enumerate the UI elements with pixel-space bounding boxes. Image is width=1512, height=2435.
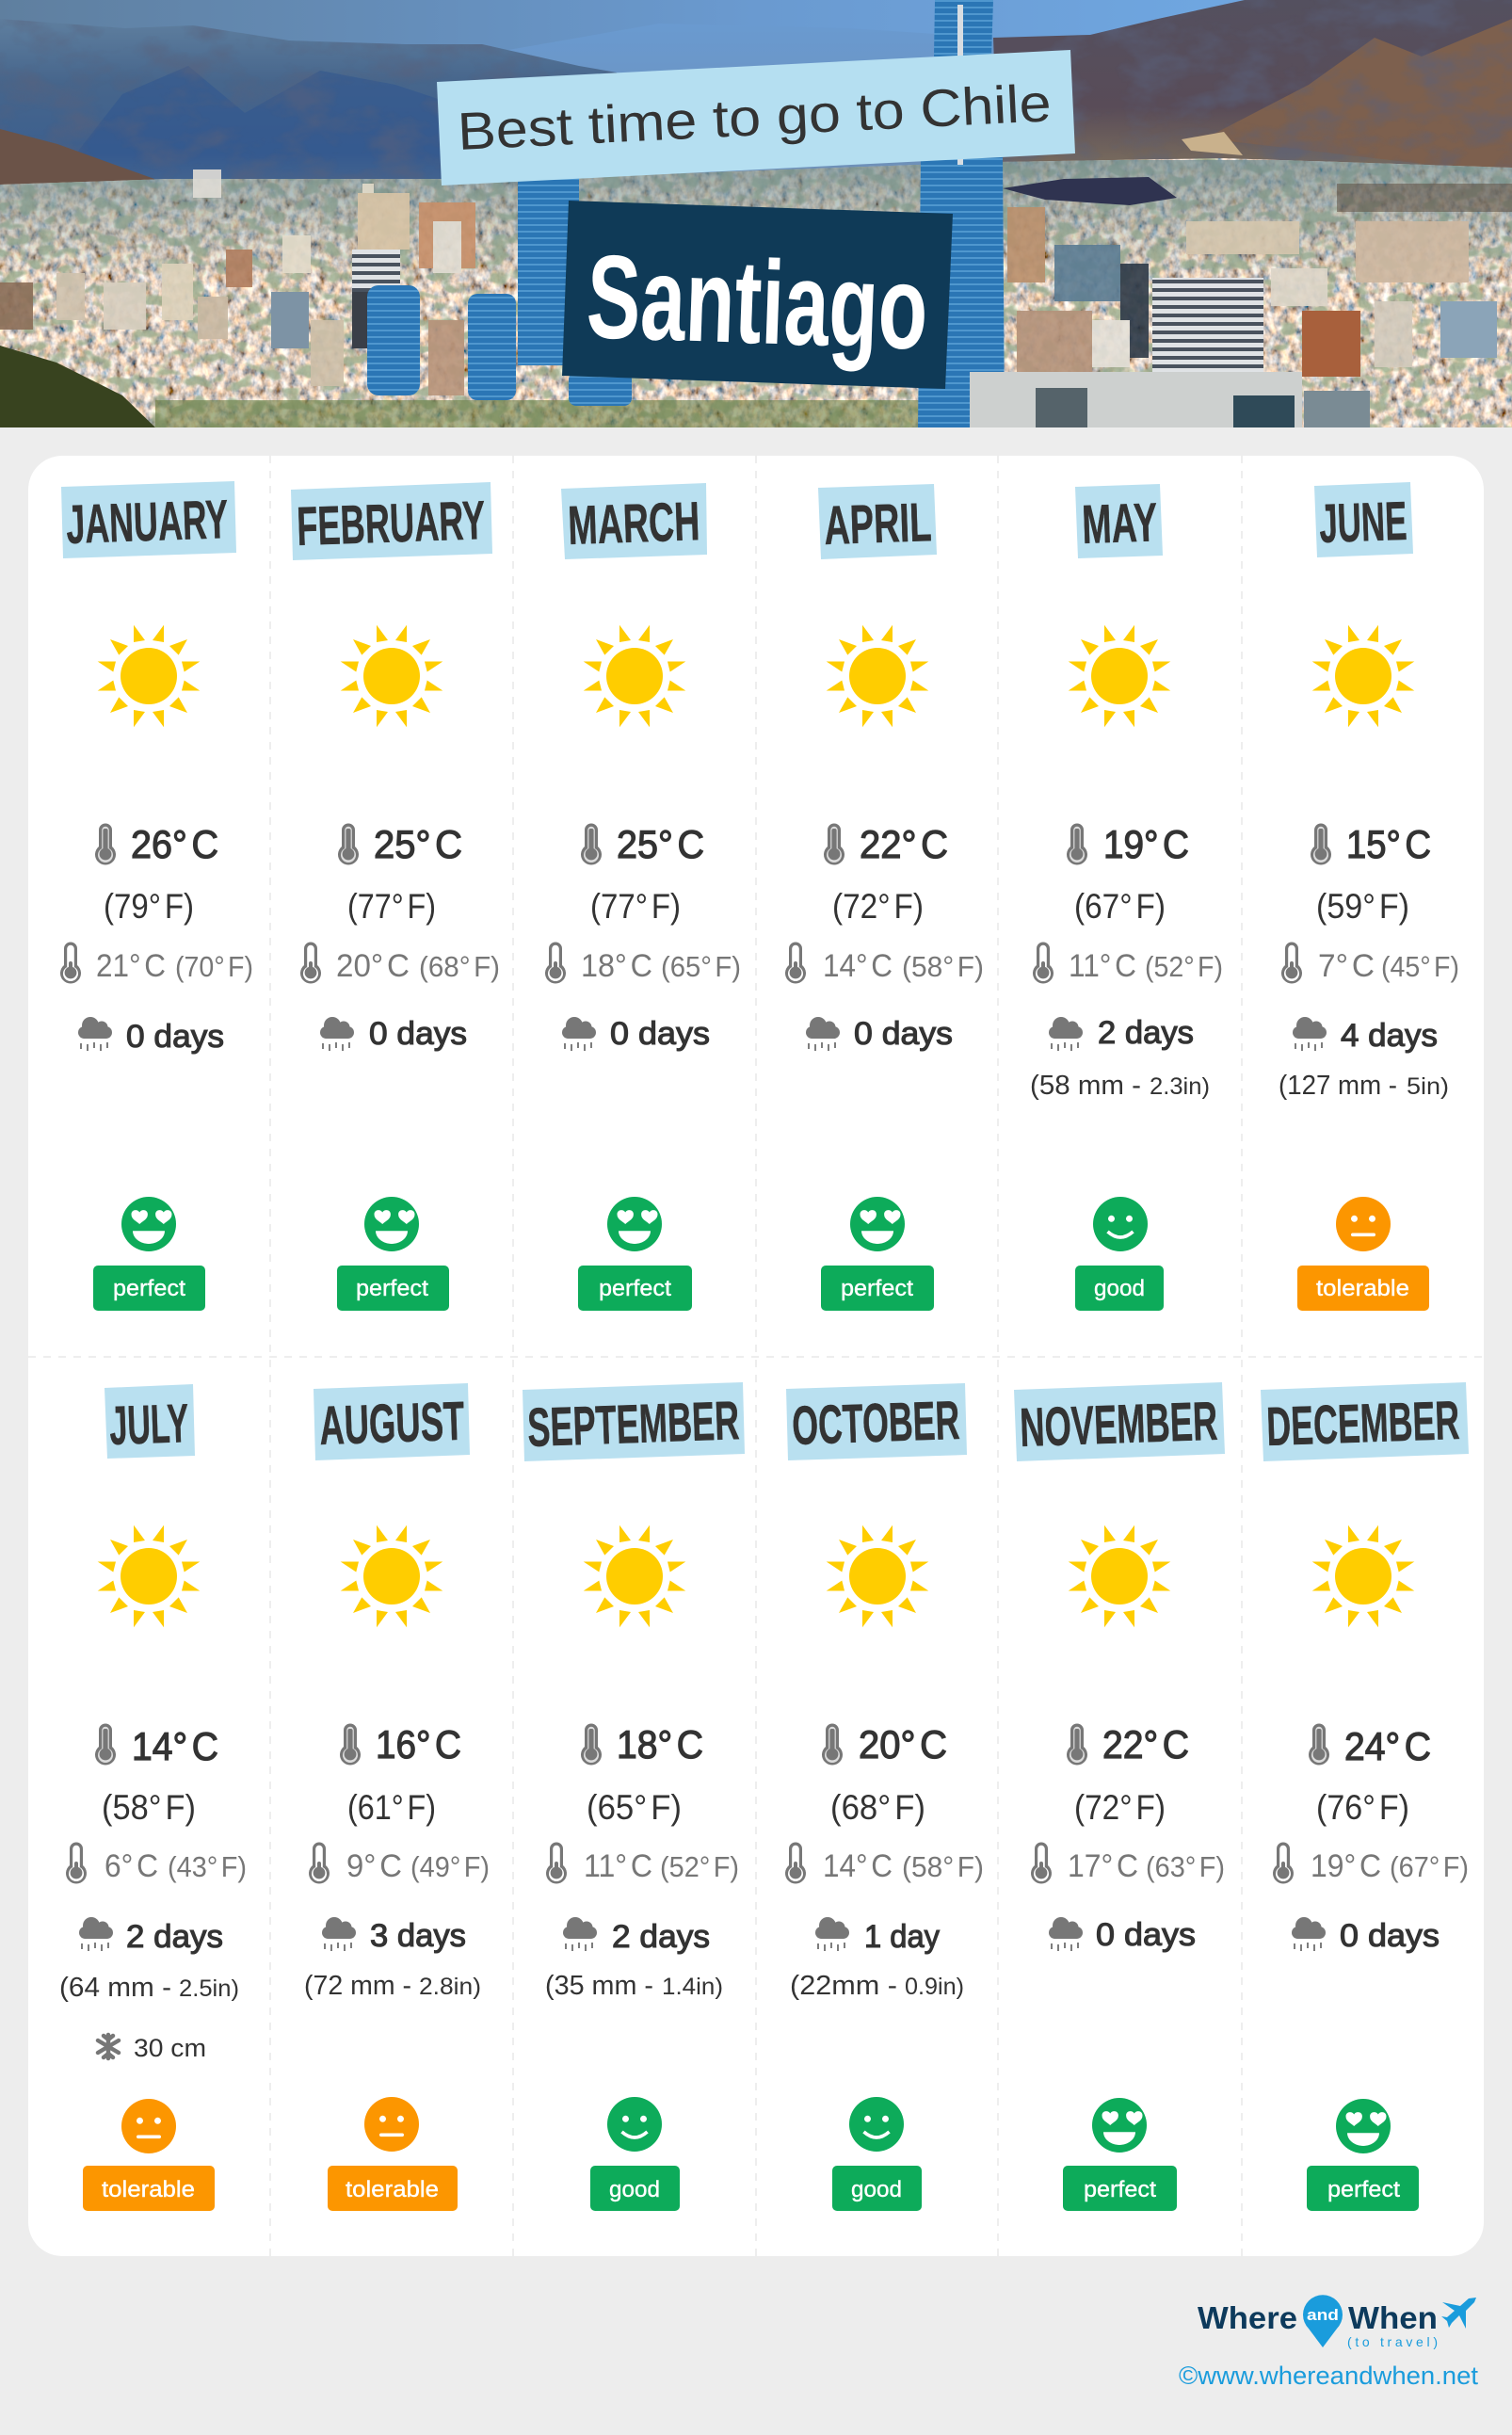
icon: sun <box>827 625 928 727</box>
rating: tolerable: tolerable <box>1316 1276 1409 1301</box>
high temperature <box>95 822 218 866</box>
low temperature: 7° C <box>1318 948 1375 984</box>
rain days: 2 days <box>1098 1015 1194 1051</box>
month: January <box>60 481 253 1311</box>
low temperature: (58° F) <box>902 1850 984 1883</box>
low temperature <box>60 942 253 984</box>
rating: tolerable: tolerable <box>346 2177 439 2202</box>
rating: perfect: perfect <box>356 1276 428 1301</box>
low temperature <box>545 942 741 984</box>
month: June <box>1279 482 1459 1311</box>
rainfall amount <box>790 1971 964 2001</box>
month label: JUNE <box>1318 491 1407 555</box>
low temperature <box>1033 942 1223 984</box>
month label <box>561 483 707 559</box>
rating: tolerable <box>1297 1197 1429 1311</box>
low temperature <box>546 1842 739 1884</box>
month label <box>818 484 937 559</box>
rain days: 0 days <box>854 1016 953 1052</box>
rain days: 0 days <box>1340 1918 1440 1954</box>
high temperature: 25° C <box>617 822 704 866</box>
rain days <box>1293 1017 1438 1054</box>
footer logo: Where and When <box>1198 2295 1476 2349</box>
month: September <box>523 1382 745 2211</box>
month label: JANUARY <box>65 489 229 556</box>
month label <box>523 1382 745 1461</box>
distant and mid-rise buildings <box>0 169 1469 395</box>
high temperature: 18° C <box>617 1722 703 1766</box>
high temperature: 25° C <box>374 822 462 866</box>
rain days <box>322 1917 466 1954</box>
high fahrenheit: (79° F) <box>104 887 194 926</box>
high temperature: 16° C <box>376 1722 461 1766</box>
high fahrenheit: (76° F) <box>1316 1788 1409 1827</box>
month label <box>105 1384 195 1459</box>
rain days: 2 days <box>126 1919 223 1955</box>
icon: sun <box>827 1525 928 1627</box>
icon: sun <box>1069 1525 1170 1627</box>
icon: sun <box>1312 625 1414 727</box>
rating: perfect: perfect <box>841 1276 913 1301</box>
high fahrenheit: (58° F) <box>102 1788 196 1827</box>
rain days <box>815 1917 940 1955</box>
month label: OCTOBER <box>791 1390 960 1457</box>
rain days: 1 day <box>864 1919 940 1955</box>
rating: perfect <box>337 1197 449 1311</box>
high temperature <box>95 1723 218 1768</box>
month: May <box>1030 484 1223 1311</box>
rain days: 0 days <box>126 1019 224 1055</box>
month label: APRIL <box>823 492 932 556</box>
low temperature <box>1273 1842 1469 1884</box>
rain days: 0 days <box>1096 1917 1196 1953</box>
low temperature: 11° C <box>584 1848 652 1884</box>
rainfall amount: (58 mm - <box>1030 1071 1141 1101</box>
high temperature <box>338 822 462 866</box>
rain days <box>1049 1015 1194 1051</box>
rain days <box>806 1016 953 1052</box>
low temperature: 11° C <box>1069 948 1136 984</box>
high temperature <box>824 822 948 866</box>
low temperature: 18° C <box>581 948 652 984</box>
rainfall amount: (22mm - <box>790 1971 897 2001</box>
low temperature: (68° F) <box>419 950 500 983</box>
panel: monthly weather card <box>28 456 1484 2256</box>
low temperature: 21° C <box>96 948 166 984</box>
low temperature <box>66 1842 247 1884</box>
icon: map pin <box>1303 2295 1343 2347</box>
rain days <box>78 1017 224 1055</box>
month label <box>61 481 236 558</box>
low temperature: (49° F) <box>410 1850 490 1883</box>
footer logo: Where and When: When <box>1348 2300 1438 2335</box>
month label: AUGUST <box>318 1391 465 1457</box>
month: March <box>545 483 741 1311</box>
high temperature: 14° C <box>132 1724 218 1768</box>
rain days <box>1049 1917 1196 1953</box>
high fahrenheit: (68° F) <box>830 1788 925 1827</box>
rainfall amount: 1.4in) <box>662 1974 723 2000</box>
rainfall amount: (72 mm - <box>304 1971 411 2001</box>
high fahrenheit: (65° F) <box>587 1788 682 1827</box>
low temperature <box>1031 1842 1225 1884</box>
low temperature <box>785 1842 984 1884</box>
banner: Best time to go to Chile <box>437 50 1075 185</box>
rainfall amount <box>1030 1071 1210 1101</box>
low temperature: (65° F) <box>661 950 741 983</box>
high temperature <box>822 1722 947 1766</box>
rating: tolerable: tolerable <box>102 2177 195 2202</box>
icon: sun <box>341 625 442 727</box>
rainfall amount: 2.3in) <box>1150 1073 1210 1100</box>
icon: sun <box>98 1525 200 1627</box>
footer logo: Where and When: (to travel) <box>1347 2334 1438 2349</box>
high fahrenheit: (61° F) <box>347 1788 436 1827</box>
month label: NOVEMBER <box>1019 1391 1218 1459</box>
month label: MARCH <box>567 491 700 556</box>
icon: airplane <box>1441 2298 1476 2329</box>
high fahrenheit: (59° F) <box>1316 887 1409 926</box>
snowfall: 30 cm <box>134 2034 206 2062</box>
icon: map pin: and <box>1307 2306 1339 2324</box>
high temperature: 15° C <box>1346 822 1431 866</box>
rainfall amount <box>304 1971 481 2001</box>
rating: good: good <box>609 2177 660 2202</box>
month label: MAY <box>1081 492 1158 556</box>
rating: good <box>832 2097 922 2211</box>
rainfall amount: 0.9in) <box>905 1974 964 2000</box>
rainfall amount: (35 mm - <box>545 1971 653 2001</box>
rating: perfect <box>578 1197 692 1311</box>
footer logo: Where and When: Where <box>1198 2300 1297 2335</box>
rating: tolerable <box>328 2097 458 2211</box>
rain days: 0 days <box>610 1016 710 1052</box>
low temperature: (70° F) <box>175 950 253 983</box>
rain days: 4 days <box>1341 1018 1438 1054</box>
rain days <box>1292 1917 1440 1954</box>
city name: Santiago <box>585 230 930 375</box>
rainfall amount: 2.8in) <box>419 1974 481 2000</box>
low temperature: 19° C <box>1311 1848 1381 1884</box>
rating: perfect <box>821 1197 934 1311</box>
high temperature <box>1309 1723 1431 1768</box>
month label <box>291 482 492 560</box>
high temperature <box>340 1722 461 1766</box>
header photo: Santiago skyline and mountains <box>0 0 1512 427</box>
month label <box>1014 1382 1225 1461</box>
icon: sun <box>584 1525 685 1627</box>
month label <box>1314 482 1413 557</box>
title block: Santiago <box>562 201 953 389</box>
rain days <box>79 1917 223 1955</box>
low temperature: (58° F) <box>902 950 984 983</box>
rating: perfect <box>1307 2099 1419 2211</box>
month: February <box>291 482 500 1311</box>
low temperature: 14° C <box>823 1848 893 1884</box>
copyright URL: ©www.whereandwhen.net <box>1179 2362 1478 2390</box>
high temperature: 26° C <box>131 822 218 866</box>
month: October <box>785 1383 984 2211</box>
high temperature: 20° C <box>859 1722 947 1766</box>
low temperature: 17° C <box>1068 1848 1138 1884</box>
low temperature <box>785 942 984 984</box>
month label: FEBRUARY <box>296 490 486 557</box>
low temperature: 6° C <box>105 1848 158 1884</box>
low temperature: 9° C <box>346 1848 402 1884</box>
high temperature <box>581 822 704 866</box>
low temperature <box>300 942 500 984</box>
low temperature: (67° F) <box>1390 1850 1469 1883</box>
rain days <box>562 1016 710 1052</box>
low temperature <box>1281 942 1459 984</box>
high temperature <box>1067 1722 1189 1766</box>
low temperature <box>309 1842 490 1884</box>
month label: SEPTEMBER <box>526 1390 740 1459</box>
month: November <box>1014 1382 1225 2211</box>
icon: sun <box>98 625 200 727</box>
low temperature: (52° F) <box>1145 950 1223 983</box>
rainfall amount: 5in) <box>1407 1073 1449 1100</box>
rating: perfect: perfect <box>1327 2177 1400 2202</box>
rating: good <box>590 2097 680 2211</box>
month label <box>314 1383 470 1460</box>
low temperature: (45° F) <box>1381 950 1459 983</box>
rating: perfect: perfect <box>1084 2177 1156 2202</box>
low temperature: 14° C <box>823 948 893 984</box>
icon: sun <box>1069 625 1170 727</box>
rating: tolerable <box>83 2099 215 2211</box>
low temperature: (43° F) <box>168 1850 247 1883</box>
rating: good: good <box>1094 1276 1145 1301</box>
high fahrenheit: (77° F) <box>590 887 681 926</box>
month: August <box>304 1383 490 2211</box>
month: April <box>785 484 984 1311</box>
rainfall amount: (64 mm - <box>59 1973 171 2003</box>
rainfall amount <box>545 1971 723 2001</box>
rain days <box>563 1917 710 1955</box>
rain days: 0 days <box>369 1016 467 1052</box>
rating: good <box>1075 1197 1164 1311</box>
rain days <box>320 1016 467 1052</box>
low temperature: (63° F) <box>1146 1850 1225 1883</box>
rating: perfect: perfect <box>599 1276 671 1301</box>
rain days: 3 days <box>370 1918 466 1954</box>
high fahrenheit: (72° F) <box>832 887 924 926</box>
icon: sun <box>1312 1525 1414 1627</box>
high temperature: 22° C <box>860 822 948 866</box>
high fahrenheit: (72° F) <box>1074 1788 1166 1827</box>
icon: sun <box>584 625 685 727</box>
month label: JULY <box>108 1393 189 1457</box>
snowfall <box>98 2034 206 2062</box>
high fahrenheit: (77° F) <box>347 887 436 926</box>
high temperature <box>581 1722 703 1766</box>
month label <box>786 1383 967 1460</box>
low temperature: 20° C <box>336 948 410 984</box>
icon: sun <box>341 1525 442 1627</box>
rating: good: good <box>851 2177 902 2202</box>
month: July <box>59 1384 247 2211</box>
high temperature: 22° C <box>1102 1722 1189 1766</box>
rainfall amount: 2.5in) <box>179 1975 239 2002</box>
high temperature: 24° C <box>1344 1724 1431 1768</box>
rain days: 2 days <box>612 1919 710 1955</box>
banner title text: Best time to go to Chile <box>457 73 1053 161</box>
low temperature: (52° F) <box>660 1850 739 1883</box>
rating: perfect: perfect <box>113 1276 185 1301</box>
month: December <box>1261 1382 1469 2211</box>
high temperature <box>1311 822 1431 866</box>
month label <box>1075 484 1163 558</box>
high temperature <box>1067 822 1189 866</box>
high temperature: 19° C <box>1103 822 1189 866</box>
rainfall amount: (127 mm - <box>1279 1071 1397 1101</box>
rating: perfect <box>1063 2098 1177 2211</box>
rainfall amount <box>59 1973 239 2003</box>
rating: perfect <box>93 1197 205 1311</box>
high fahrenheit: (67° F) <box>1074 887 1166 926</box>
